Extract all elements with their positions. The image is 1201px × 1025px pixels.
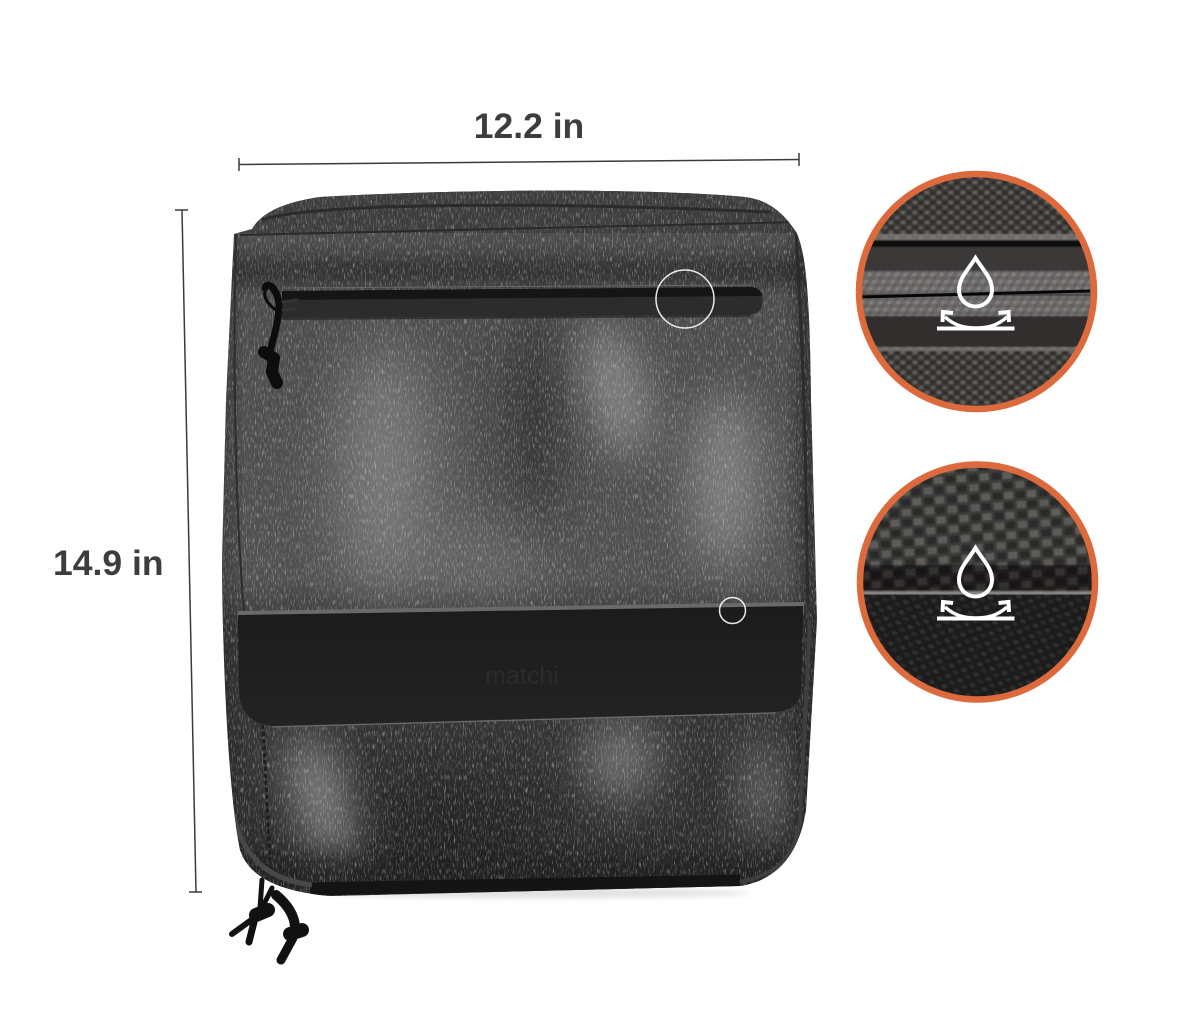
edge seams (240, 222, 800, 235)
zipper pull cord (264, 285, 297, 383)
highlight circle: zipper (656, 270, 714, 328)
dimension label: height: 14.9 in (53, 543, 164, 583)
light sheen patches (277, 314, 780, 873)
shadow below bag (330, 888, 750, 898)
icon: water drop repelled (937, 548, 1014, 618)
leather flap (238, 602, 804, 727)
orange ring (860, 464, 1095, 700)
icon: water drop repelled (937, 258, 1014, 328)
highlight circle: flap (720, 598, 746, 624)
fabric close-up photo (863, 468, 1092, 696)
front zipper (282, 285, 763, 319)
bag product photo (215, 180, 825, 960)
dimension label: width: 12.2 in (474, 106, 584, 146)
detail callout: waterproof zipper (850, 165, 1100, 420)
fabric speckle (215, 185, 825, 900)
detail callout: waterproof fabric (850, 455, 1105, 709)
zipper close-up photo (862, 177, 1091, 406)
flap logo: matchi (485, 662, 559, 690)
dimension line: height (175, 210, 202, 892)
bag body (215, 180, 825, 905)
bottom binding (310, 881, 740, 889)
dimension line: width (239, 153, 799, 171)
dark fold shadows (218, 190, 820, 900)
bottom zipper pulls (232, 880, 302, 960)
orange ring (859, 174, 1094, 409)
